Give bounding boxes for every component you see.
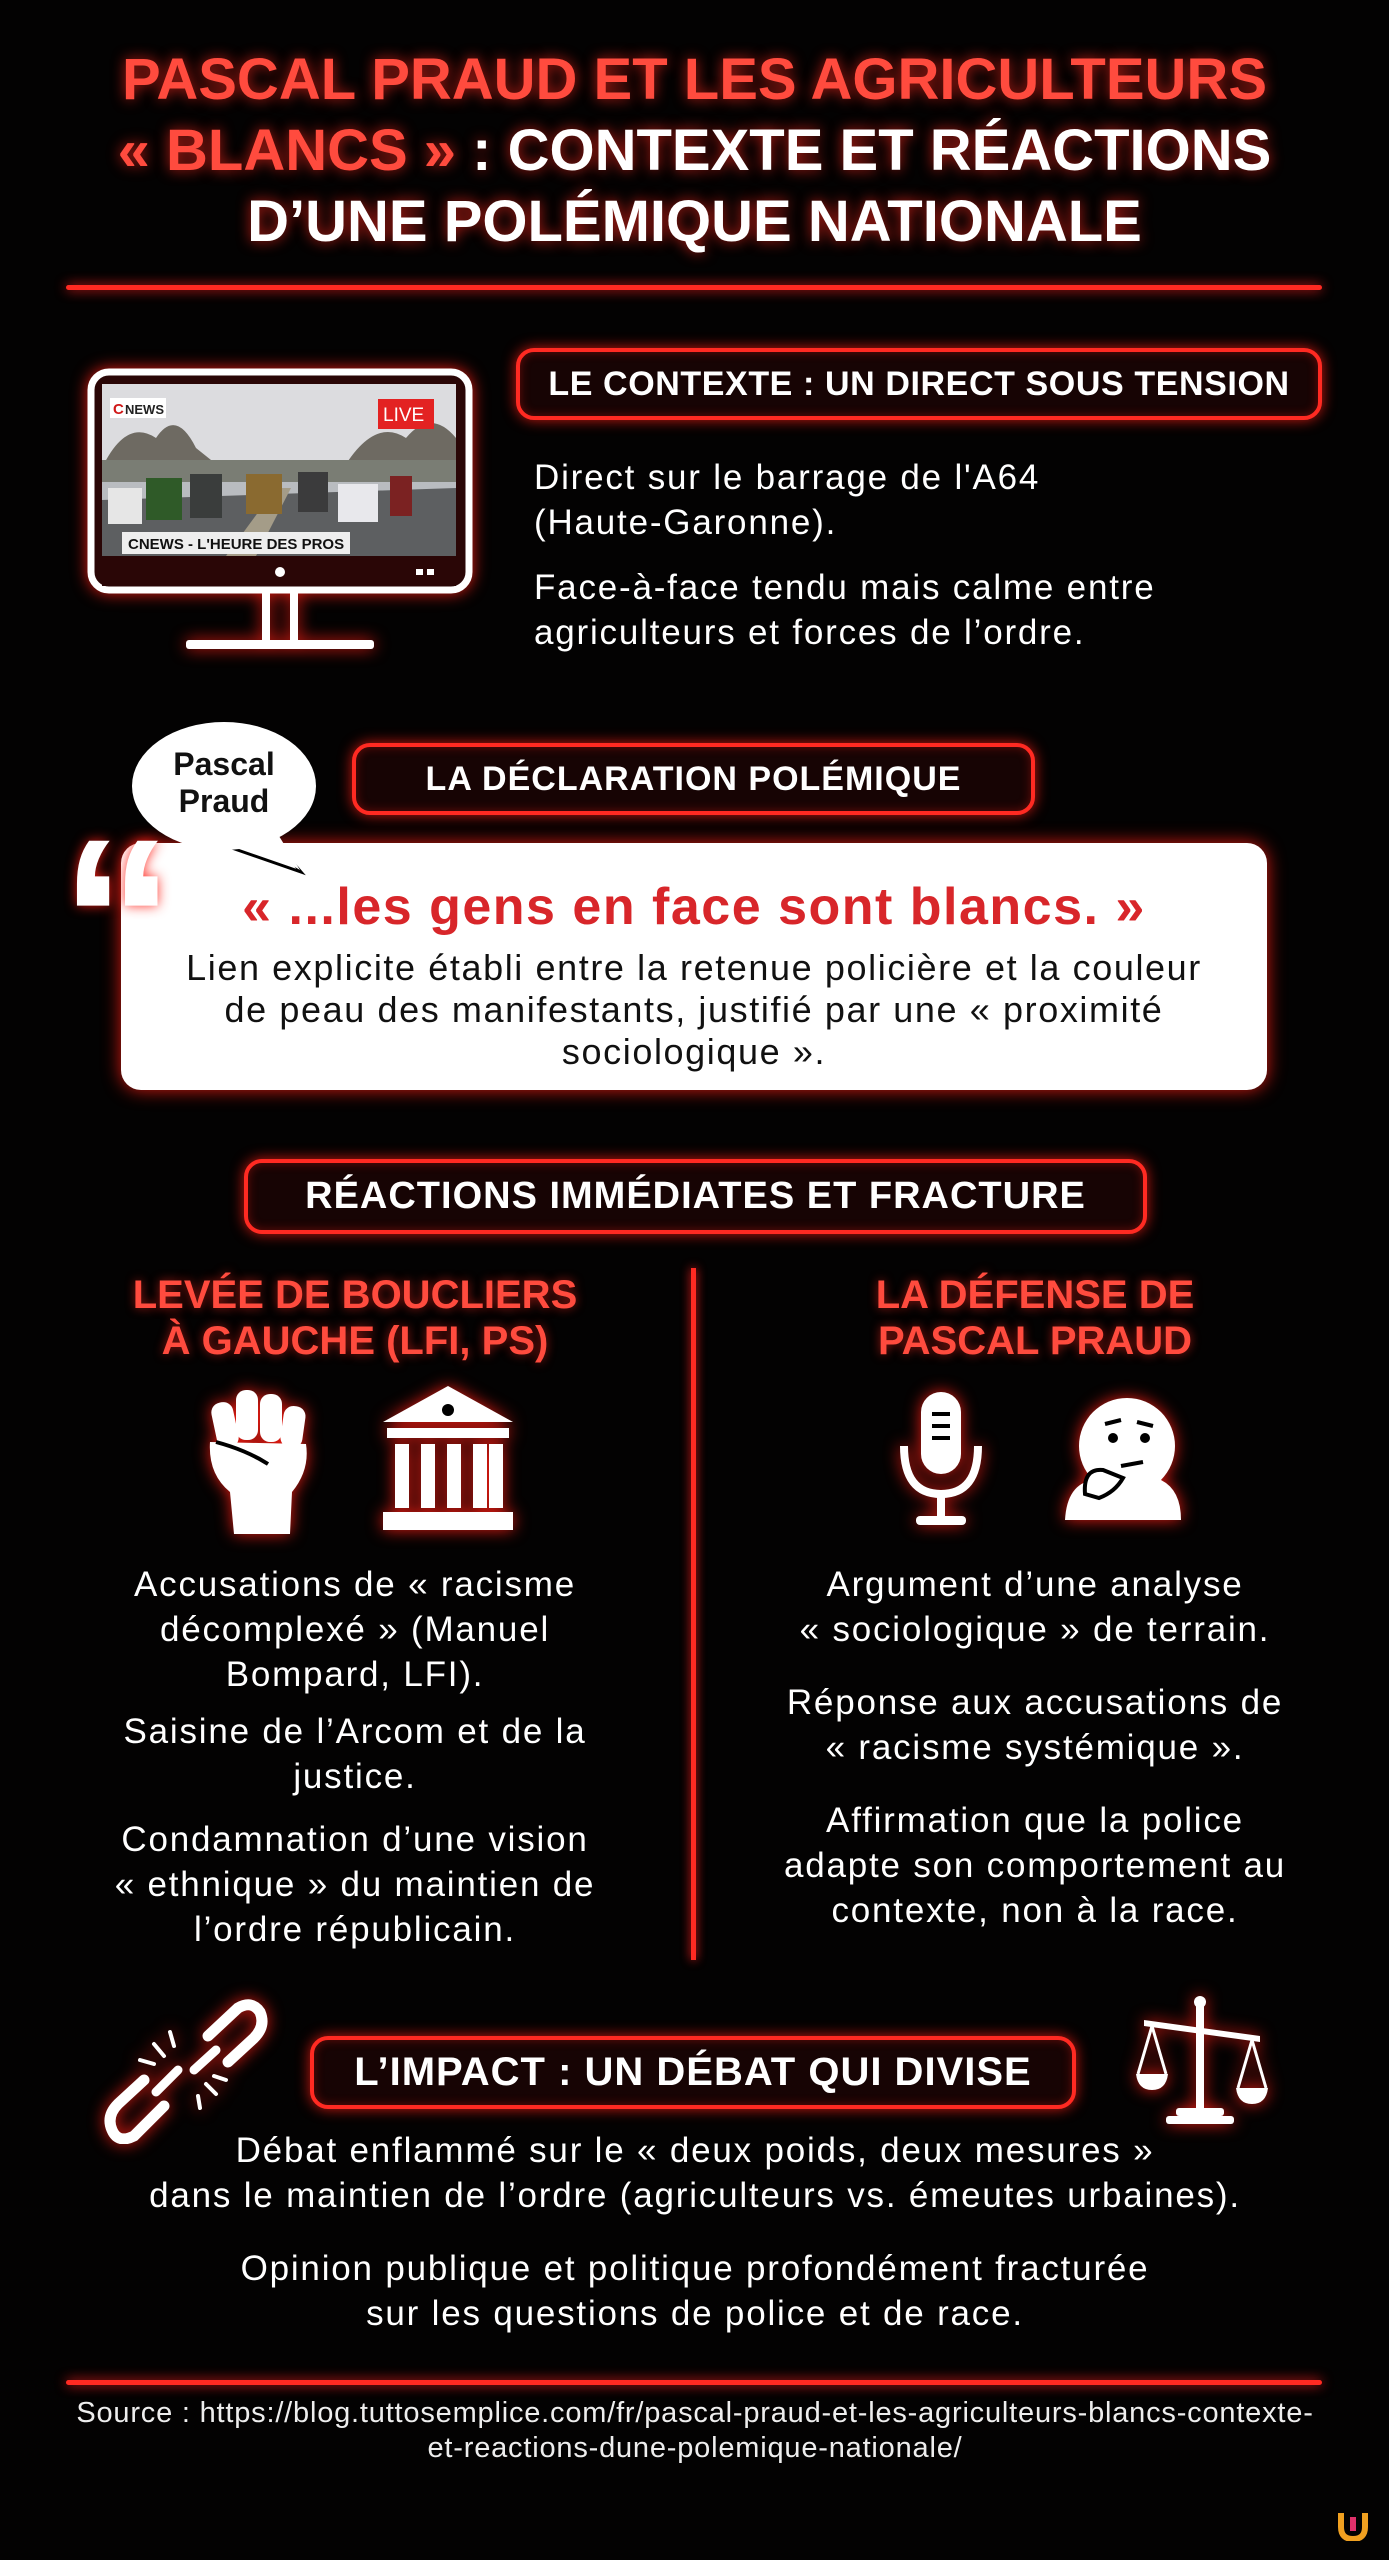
text: contexte: Face-à-face tendu mais calme entre [534,568,1155,607]
speech bubble: Pascal Praud: Praud [179,783,269,819]
icon: TV monitor with CNews screen [74,356,486,662]
title: « BLANCS » : CONTEXTE ET RÉACTIONS [118,118,1271,183]
heading: levée de boucliers: LEVÉE DE BOUCLIERS [133,1273,577,1317]
icon: microphone [888,1380,994,1538]
panel: right reactions [784,1268,1286,1930]
icon: raised fist [198,1378,320,1547]
icon: TV monitor with CNews screen: LIVE [383,405,424,426]
heading: déclaration [352,743,1035,815]
text: impact: Opinion publique et politique profondément fracturée [241,2249,1149,2288]
heading: réactions: RÉACTIONS IMMÉDIATES ET FRACTURE [305,1175,1086,1217]
text: left bullets: l’ordre républicain. [194,1910,516,1949]
icon: TV monitor with CNews screen: CNEWS - L'HEURE DES PROS [128,536,344,553]
icon: TV monitor with CNews screen: C [113,401,124,418]
text: right bullets: Affirmation que la police [826,1801,1244,1840]
icon: broken chain [92,1988,280,2156]
text: right bullets: Argument d’une analyse [826,1565,1244,1604]
text: contexte: (Haute-Garonne). [534,503,837,542]
speech bubble: Pascal Praud: Pascal [173,746,275,782]
heading: levée de boucliers [128,1268,582,1368]
text: right bullets: « sociologique » de terrain. [800,1610,1270,1649]
text: contexte [534,458,1155,652]
quote text: « ...les gens en face sont blancs. » [242,878,1146,936]
icon: TV monitor with CNews screen: NEWS [125,402,164,417]
text: left bullets: Bompard, LFI). [226,1655,484,1694]
heading: impact: L’IMPACT : UN DÉBAT QUI DIVISE [354,2050,1032,2094]
heading: contexte: LE CONTEXTE : UN DIRECT SOUS TENSION [548,364,1290,402]
speech bubble: Pascal Praud [132,722,316,876]
heading: défense: LA DÉFENSE DE [876,1273,1194,1317]
quote explanation: Lien explicite établi entre la retenue policière et la couleur [186,947,1202,988]
text: impact: Débat enflammé sur le « deux poids, deux mesures » [236,2131,1154,2170]
text: right bullets: adapte son comportement au [784,1846,1286,1885]
icon: thinking face [1054,1386,1193,1533]
text: left bullets: Saisine de l’Arcom et de la [124,1712,586,1751]
heading: défense: PASCAL PRAUD [878,1319,1192,1363]
title: D’UNE POLÉMIQUE NATIONALE [247,189,1142,254]
text: source: et-reactions-dune-polemique-nationale/ [428,2432,962,2464]
icon: scales of justice [1125,1986,1279,2137]
text: left bullets: justice. [293,1757,417,1796]
text: left bullets: Condamnation d’une vision [121,1820,589,1859]
text: left bullets: « ethnique » du maintien de [115,1865,595,1904]
quote explanation [186,947,1202,1072]
text: right bullets: Réponse aux accusations de [787,1683,1283,1722]
heading: réactions [244,1159,1147,1234]
text: left bullets: décomplexé » (Manuel [160,1610,550,1649]
heading: défense [871,1268,1198,1363]
text: right bullets [784,1565,1286,1930]
quote explanation: de peau des manifestants, justifié par une « proximité [225,989,1163,1030]
text: impact: sur les questions de police et de race. [366,2294,1024,2333]
callout: quote box [121,843,1267,1090]
text: source [76,2397,1314,2464]
icon: large quote mark: “ [60,791,175,1048]
text: impact [149,2131,1241,2333]
icon: logo [1338,2513,1368,2541]
text: source: Source : https://blog.tuttosemplice.com/fr/pascal-praud-et-les-agriculteurs-blancs-contexte- [76,2397,1314,2429]
text: contexte: agriculteurs et forces de l’ordre. [534,613,1085,652]
text: impact: dans le maintien de l’ordre (agriculteurs vs. émeutes urbaines). [149,2176,1241,2215]
heading: déclaration: LA DÉCLARATION POLÉMIQUE [426,760,961,798]
title: PASCAL PRAUD ET LES AGRICULTEURS [122,47,1267,112]
heading: impact [310,2036,1076,2109]
text: left bullets: Accusations de « racisme [134,1565,576,1604]
text: right bullets: contexte, non à la race. [831,1891,1239,1930]
quote explanation: sociologique ». [562,1031,826,1072]
text: right bullets: « racisme systémique ». [826,1728,1244,1767]
heading: contexte [516,348,1322,420]
title [112,47,1278,262]
heading: levée de boucliers: À GAUCHE (LFI, PS) [162,1319,548,1363]
panel: left reactions [115,1268,595,1949]
icon: institution building [370,1376,526,1543]
text: contexte: Direct sur le barrage de l'A64 [534,458,1040,497]
text: left bullets [115,1565,595,1949]
